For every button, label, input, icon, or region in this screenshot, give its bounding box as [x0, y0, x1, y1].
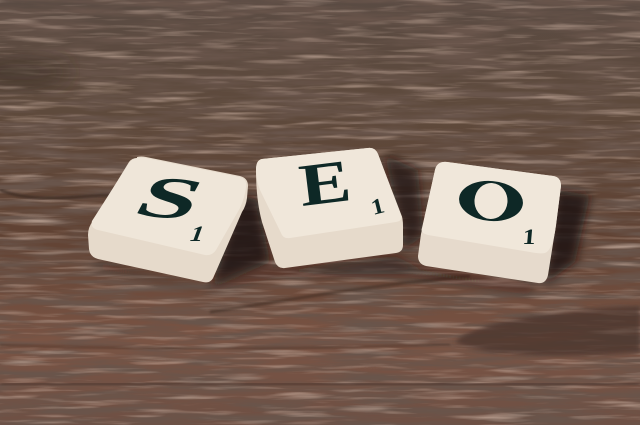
- tile body: [88, 156, 248, 282]
- tile value: 1: [368, 193, 387, 220]
- tile face: [422, 162, 561, 253]
- tile face: [256, 148, 401, 238]
- tile: O: [418, 162, 561, 283]
- letter O: [457, 178, 525, 224]
- tile: S: [88, 156, 248, 282]
- tile face: [92, 158, 246, 255]
- tile value: 1: [522, 225, 537, 249]
- tile body: [256, 148, 403, 268]
- letter E: E: [296, 147, 354, 219]
- tile: E: [256, 147, 403, 268]
- letter S: S: [124, 163, 216, 233]
- tile body: [418, 162, 561, 283]
- tile value: 1: [186, 222, 208, 246]
- tile shadows: [92, 155, 590, 292]
